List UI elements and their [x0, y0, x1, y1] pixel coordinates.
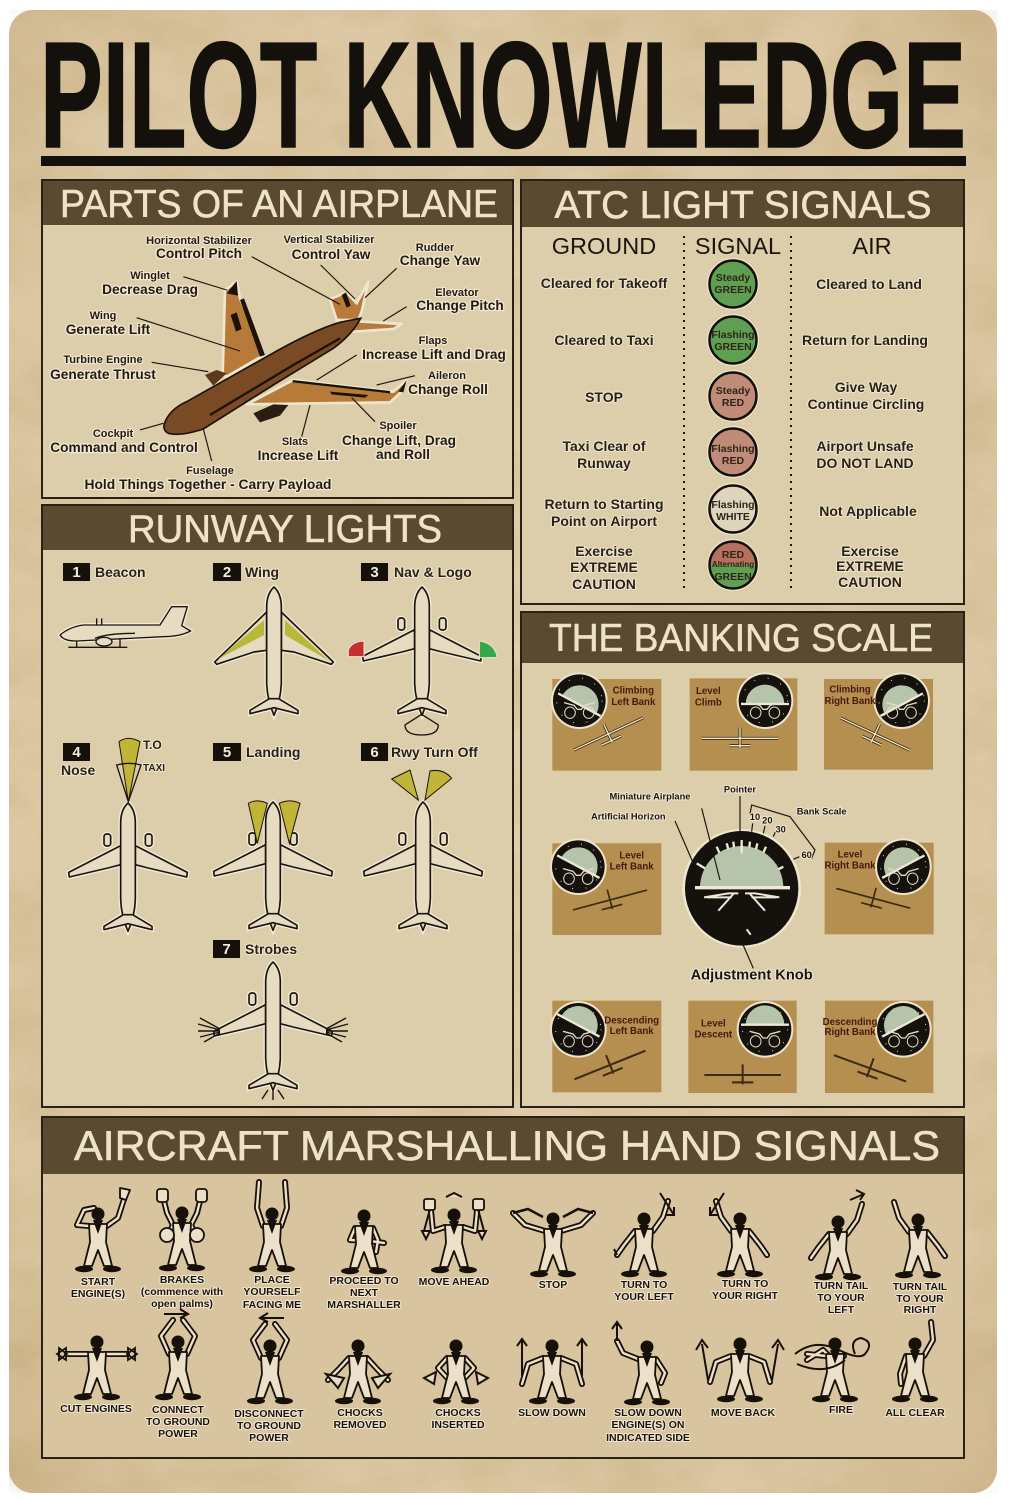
signal: slow down engines on indicated side: SLOW DOWN: [614, 1407, 682, 1419]
panel: parts of an airplane: [42, 180, 513, 498]
signal: disconnect to ground power: DISCONNECT: [234, 1408, 304, 1420]
callouts: airplane parts: Flaps: [419, 335, 447, 347]
number tags and labels: 3: [370, 564, 379, 581]
signal: stop: [513, 1209, 593, 1291]
card: level left bank: Level: [619, 850, 644, 861]
air column: Not Applicable: [819, 503, 917, 519]
header bar: marshalling: [43, 1118, 963, 1174]
callouts: airplane parts: Elevator: [435, 287, 479, 299]
signal: slow down: [517, 1339, 587, 1419]
signal: chocks inserted: [424, 1340, 488, 1431]
column heads: [552, 233, 892, 259]
signal: flashing white: Flashing: [711, 499, 755, 511]
card: climbing left bank: Left Bank: [611, 697, 656, 708]
signal: alternating red and green: RED: [722, 549, 745, 561]
signal: all clear: [885, 1322, 945, 1419]
signal: fire: FIRE: [829, 1404, 853, 1416]
signal: proceed to next marshaller: PROCEED TO: [329, 1275, 399, 1287]
ground column: STOP: [585, 389, 623, 405]
signal: turn tail to your right: RIGHT: [904, 1304, 937, 1316]
signal column: [707, 258, 759, 591]
air column: Continue Circling: [808, 396, 924, 412]
card: level left bank: Left Bank: [610, 861, 654, 872]
callouts: airplane parts: Generate Thrust: [50, 367, 156, 382]
signal: turn to your right: TURN TO: [722, 1278, 768, 1290]
signal: all clear: ALL CLEAR: [885, 1407, 945, 1419]
heading: parts: PARTS OF AN AIRPLANE: [60, 183, 498, 226]
signal: alternating red and green: [707, 539, 759, 591]
number tags and labels: [61, 563, 478, 958]
signal: turn tail to your right: TURN TAIL: [893, 1281, 948, 1293]
indicator leaders and labels: 60: [801, 850, 812, 860]
callouts: airplane parts: Change Yaw: [400, 253, 481, 268]
card: level right bank: [825, 838, 934, 934]
signal: brakes: open palms): [151, 1298, 213, 1310]
number tags and labels: 7: [222, 941, 231, 958]
ground column: Point on Airport: [551, 513, 657, 529]
card: descending left bank: Left Bank: [610, 1026, 654, 1037]
card: level climb: Climb: [695, 698, 722, 709]
callouts: airplane parts: Change Pitch: [416, 298, 504, 313]
air column: Return for Landing: [802, 332, 928, 348]
callouts: airplane parts: Winglet: [130, 270, 170, 282]
callouts: airplane parts: Generate Lift: [66, 322, 151, 337]
callouts: airplane parts: Slats: [282, 436, 308, 448]
air column: Exercise: [841, 543, 899, 559]
callouts: airplane parts: Hold Things Together - Carry Payload: [84, 477, 332, 492]
card: level climb: Level: [696, 686, 721, 697]
number tags and labels: 6: [370, 744, 379, 761]
indicator leaders and labels: Miniature Airplane: [609, 791, 691, 801]
signal: move ahead: [419, 1193, 490, 1288]
callouts: airplane parts: Rudder: [416, 242, 455, 254]
signal: steady red: [707, 370, 759, 422]
signal: flashing red: RED: [722, 455, 745, 467]
number tags and labels: T.O: [143, 738, 162, 752]
number tags and labels: Landing: [246, 744, 300, 760]
air column: Cleared to Land: [816, 276, 922, 292]
card: level climb: [690, 672, 797, 771]
indicator leaders and labels: 10: [750, 812, 760, 822]
callouts: airplane parts: Control Pitch: [156, 246, 242, 261]
signal: flashing green: Flashing: [711, 329, 755, 341]
indicator leaders and labels: 30: [775, 825, 786, 835]
signal: cut engines: [57, 1336, 137, 1415]
signal: turn tail to your left: TURN TAIL: [814, 1280, 869, 1292]
signal: proceed to next marshaller: NEXT: [350, 1287, 379, 1299]
callouts: airplane parts: Fuselage: [186, 465, 234, 477]
plane 7: strobe lights: [198, 962, 348, 1100]
header bar: runway: [43, 506, 512, 550]
column heads: GROUND: [552, 233, 656, 259]
header bar: ATC: [522, 181, 963, 227]
card: level descent: Descent: [695, 1030, 733, 1041]
panel: banking scale: [521, 612, 964, 1107]
card: level left bank: [550, 838, 661, 935]
indicator leaders and labels: Bank Scale: [797, 806, 847, 816]
ground column: Runway: [577, 455, 631, 471]
signal: start engines: [71, 1188, 130, 1300]
card: descending left bank: [550, 997, 661, 1092]
signal: stop: STOP: [539, 1279, 567, 1291]
signal: turn to your left: TURN TO: [621, 1279, 667, 1291]
signal: turn tail to your right: TO YOUR: [896, 1293, 944, 1305]
signal: turn tail to your left: TO YOUR: [817, 1292, 865, 1304]
card: climbing right bank: Climbing: [829, 685, 871, 696]
card: descending right bank: Descending: [823, 1017, 877, 1028]
signal: steady red: RED: [722, 397, 745, 409]
heading: marshalling: AIRCRAFT MARSHALLING HAND SIGNALS: [74, 1122, 940, 1169]
signal: disconnect to ground power: POWER: [249, 1432, 289, 1444]
number tags and labels: Nav & Logo: [394, 564, 472, 580]
callouts: airplane parts: Change Roll: [408, 382, 488, 397]
signal: fire: [795, 1338, 869, 1416]
panel: ATC light signals: [521, 180, 964, 604]
card: level right bank: Level: [838, 849, 862, 860]
card: descending right bank: [823, 997, 933, 1093]
callouts: airplane parts: Spoiler: [379, 420, 417, 432]
signal: alternating red and green: GREEN: [714, 571, 752, 583]
signal: connect to ground power: POWER: [158, 1428, 198, 1440]
ground column: Cleared to Taxi: [554, 332, 654, 348]
signal: connect to ground power: CONNECT: [152, 1404, 205, 1416]
number tags and labels: TAXI: [143, 763, 165, 774]
callouts: airplane parts: Control Yaw: [292, 247, 371, 262]
callouts: airplane parts: Horizontal Stabilizer: [146, 235, 253, 247]
signal: turn to your right: YOUR RIGHT: [712, 1290, 779, 1302]
signal: steady green: GREEN: [714, 284, 752, 296]
air column: Give Way: [835, 379, 897, 395]
heading: ATC: ATC LIGHT SIGNALS: [554, 184, 932, 227]
number tags and labels: Strobes: [245, 941, 297, 957]
callouts: airplane parts: Cockpit: [93, 428, 134, 440]
air column: DO NOT LAND: [816, 455, 914, 471]
header bar: banking: [522, 613, 963, 663]
signal: alternating red and green: Alternating: [712, 560, 754, 569]
callouts: airplane parts: Increase Lift: [258, 448, 339, 463]
signal: place yourself facing me: FACING ME: [243, 1299, 301, 1311]
indicator leaders and labels: [591, 785, 847, 983]
ground column: [541, 275, 668, 592]
airplane diagram: [137, 257, 415, 461]
signal: steady red: Steady: [716, 385, 750, 397]
ground column: Exercise: [575, 543, 633, 559]
callouts: airplane parts: Increase Lift and Drag: [362, 347, 506, 362]
column heads: AIR: [852, 233, 892, 259]
signal: chocks inserted: INSERTED: [431, 1419, 485, 1431]
card: level descent: [688, 1001, 797, 1093]
number tags and labels: 2: [223, 564, 231, 581]
callouts: airplane parts: Turbine Engine: [63, 354, 143, 366]
indicator leaders and labels: Adjustment Knob: [691, 967, 813, 983]
signal: flashing white: [707, 483, 759, 535]
signal: place yourself facing me: PLACE: [254, 1274, 290, 1286]
signal: move back: MOVE BACK: [711, 1407, 776, 1419]
plane 4: nose lights: [69, 738, 187, 931]
callouts: airplane parts: Command and Control: [50, 440, 198, 455]
column heads: SIGNAL: [695, 233, 781, 259]
signal: steady green: [707, 258, 759, 310]
signal: start engines: ENGINE(S): [71, 1288, 125, 1300]
callouts: airplane parts: and Roll: [376, 447, 430, 462]
plane 6: runway turn off lights: [364, 770, 482, 930]
signal: cut engines: CUT ENGINES: [60, 1403, 132, 1415]
signal: flashing red: Flashing: [711, 443, 755, 455]
card: level descent: Level: [701, 1019, 726, 1030]
signal: slow down engines on indicated side: ENGINE(S) ON: [612, 1419, 684, 1431]
signal: connect to ground power: TO GROUND: [146, 1416, 210, 1428]
signal: slow down: SLOW DOWN: [518, 1407, 586, 1419]
signal: proceed to next marshaller: [327, 1210, 401, 1311]
attitude cards: [550, 672, 934, 1093]
ground column: CAUTION: [572, 576, 636, 592]
heading: banking: THE BANKING SCALE: [549, 617, 933, 660]
signal: turn tail to your right: [893, 1202, 948, 1316]
panel: runway lights: [42, 505, 513, 1107]
callouts: airplane parts: [50, 234, 506, 492]
signal: proceed to next marshaller: MARSHALLER: [327, 1299, 401, 1311]
signal: chocks inserted: CHOCKS: [435, 1407, 481, 1419]
signal: flashing white: WHITE: [716, 511, 750, 523]
number tags and labels: Beacon: [95, 564, 146, 580]
header bar: parts: [43, 181, 512, 225]
signal: connect to ground power: [146, 1309, 210, 1440]
number tags and labels: Nose: [61, 762, 95, 778]
callouts: airplane parts: Vertical Stabilizer: [283, 234, 375, 246]
signal: brakes: BRAKES: [160, 1274, 204, 1286]
plane 2: wing lights: [215, 587, 333, 715]
callouts: airplane parts: Change Lift, Drag: [342, 433, 456, 448]
air column: Airport Unsafe: [816, 438, 914, 454]
signal: chocks removed: [326, 1340, 390, 1431]
card: climbing right bank: [824, 672, 933, 770]
main attitude indicator: [682, 829, 801, 948]
indicator leaders and labels: Pointer: [724, 785, 756, 795]
card: descending right bank: Right Bank: [825, 1027, 876, 1038]
signal: disconnect to ground power: [234, 1313, 304, 1444]
signal: place yourself facing me: [243, 1182, 301, 1311]
signal: turn to your left: [614, 1193, 674, 1303]
signal: chocks removed: CHOCKS: [337, 1407, 383, 1419]
number tags and labels: Rwy Turn Off: [391, 744, 478, 760]
card: level right bank: Right Bank: [825, 860, 876, 871]
indicator leaders and labels: Artificial Horizon: [591, 811, 666, 821]
signal: slow down engines on indicated side: INDICATED SIDE: [606, 1432, 690, 1444]
signal: flashing green: GREEN: [714, 341, 752, 353]
signal: steady green: Steady: [716, 272, 750, 284]
air column: [802, 276, 928, 590]
card: climbing left bank: [551, 672, 661, 771]
ground column: Cleared for Takeoff: [541, 275, 668, 291]
signal: flashing green: [707, 314, 759, 366]
panel: marshalling hand signals: [42, 1117, 964, 1458]
plane 1: beacon: [60, 607, 191, 647]
signal: turn tail to your left: LEFT: [828, 1304, 855, 1316]
ground column: Taxi Clear of: [562, 438, 646, 454]
signal: move back: [696, 1338, 784, 1419]
air column: EXTREME: [836, 558, 904, 574]
signal: place yourself facing me: YOURSELF: [243, 1286, 301, 1298]
ground column: Return to Starting: [544, 496, 664, 512]
number tags and labels: 1: [72, 564, 81, 581]
signal: slow down engines on indicated side: [606, 1322, 690, 1444]
number tags and labels: Wing: [245, 564, 279, 580]
indicator leaders and labels: 20: [762, 815, 773, 825]
title rule: [41, 156, 966, 166]
callouts: airplane parts: Aileron: [428, 370, 466, 382]
plane 5: landing lights: [214, 801, 332, 930]
signal: flashing red: [707, 426, 759, 478]
signal: move ahead: MOVE AHEAD: [419, 1276, 490, 1288]
heading: runway: RUNWAY LIGHTS: [128, 508, 442, 551]
signal: brakes: [141, 1189, 223, 1310]
callouts: airplane parts: Decrease Drag: [102, 282, 198, 297]
card: climbing left bank: Climbing: [613, 685, 654, 696]
signal: chocks removed: REMOVED: [333, 1419, 387, 1431]
plane 3: nav and logo lights: [348, 587, 497, 735]
signal: turn to your left: YOUR LEFT: [614, 1291, 674, 1303]
signal: brakes: (commence with: [141, 1286, 223, 1298]
signal: turn tail to your left: [811, 1190, 869, 1316]
card: climbing right bank: Right Bank: [825, 696, 876, 707]
signal: start engines: START: [81, 1276, 116, 1288]
air column: CAUTION: [838, 574, 902, 590]
column dividers: [684, 236, 791, 590]
card: descending left bank: Descending: [604, 1015, 659, 1026]
number tags and labels: 5: [223, 744, 231, 761]
ground column: EXTREME: [570, 559, 638, 575]
signal: disconnect to ground power: TO GROUND: [237, 1420, 301, 1432]
signal: turn to your right: [710, 1193, 779, 1302]
number tags and labels: 4: [72, 744, 81, 761]
callouts: airplane parts: Wing: [90, 310, 116, 322]
